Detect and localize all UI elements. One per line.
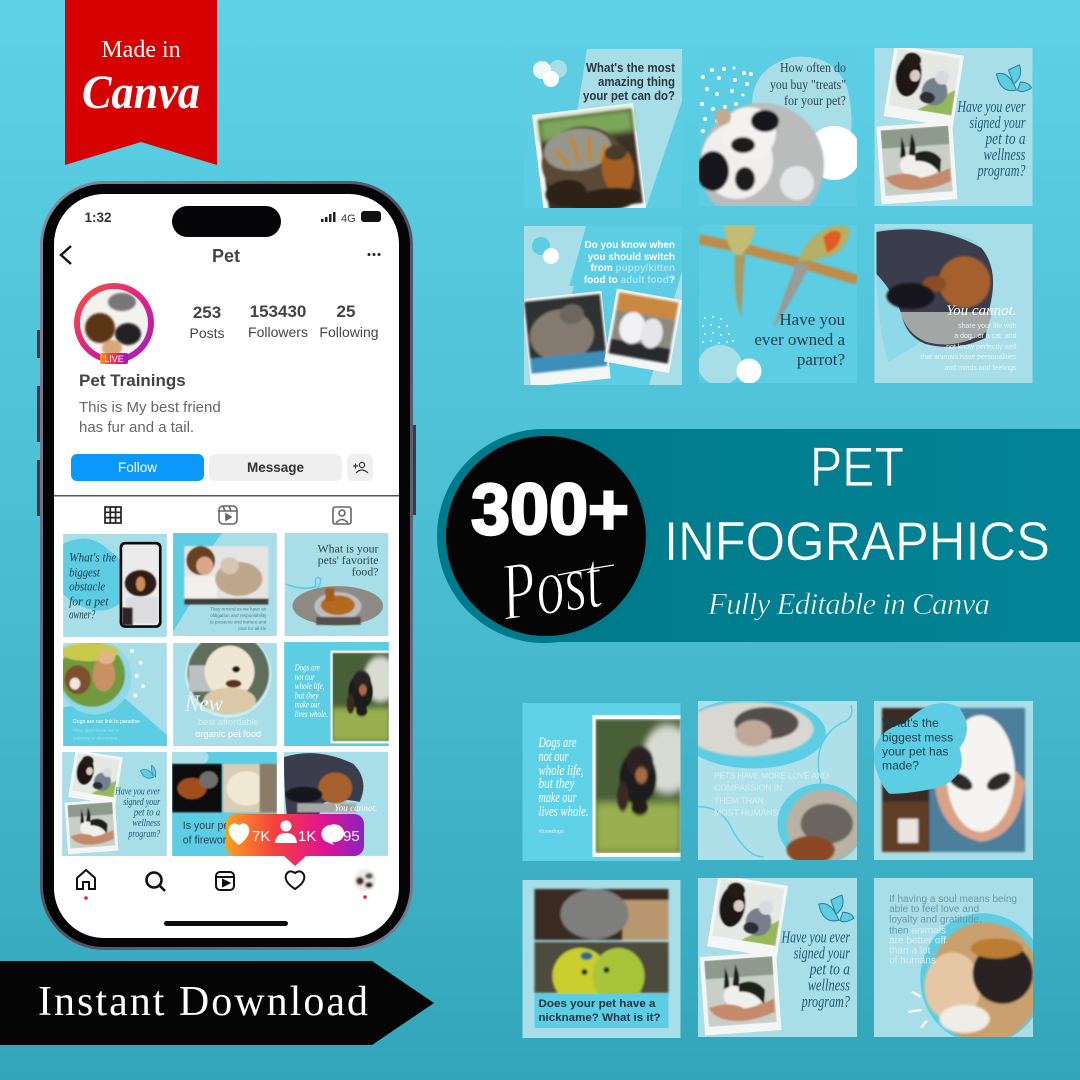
phone post 7: wellness program: pet to a [133,808,160,819]
phone post 6: running dog: whole life, [295,682,325,692]
phone mockup [37,181,416,950]
icon: reels [216,872,234,890]
heading: INFOGRAPHICS: INFOGRAPHICS [664,510,1050,572]
subheading: Fully Editable in Canva: Fully Editable in Canva [707,586,990,621]
status bar [84,206,381,237]
phone post 1: biggest obstacle [63,534,167,637]
post tile: you cannot: and minds and feelings [944,365,1017,372]
phone post 1: biggest obstacle: obstacle [69,578,105,593]
follow button [71,454,204,481]
engagement badge [226,814,364,866]
icon: heart [286,871,304,889]
post tile: treats: How often do [780,61,846,76]
post tile: you cannot: that animals have personalities [920,354,1017,361]
post tile: soul quote: able to feel love and [889,904,979,915]
phone post 4: puppies on grass [63,643,167,746]
phone post 6: running dog [284,642,389,746]
post tile: treats: for your pet? [784,94,846,109]
phone post 3: favorite food: food? [352,565,378,579]
phone post 2: girl and husky: They remind us we have an [210,606,267,611]
tab icon: tagged [333,507,351,524]
engagement badge: 95 [343,828,360,845]
post tile: switch food: Do you know when [584,240,675,251]
post tile: you cannot: a dog...or a cat, and [954,333,1017,340]
phone post 9: dog and cat: You cannot. [334,803,377,813]
post tile: soul quote: of humans [889,956,936,967]
profile bio: has fur and a tail. [79,419,194,436]
phone post 3: favorite food [284,533,388,636]
icon: home [77,870,95,889]
tab icon: reels [219,506,237,524]
post tile: soul quote: are better off [889,935,946,946]
phone post 2: girl and husky: to preserve and nurture and [210,620,267,625]
phone post 4: puppies on grass: They don't know evil or [73,728,120,733]
post tile: pets have more love: THEM THAN [714,796,764,806]
phone post 5: golden retriever: best affordable [198,717,259,727]
phone post 5: golden retriever: organic pet food [195,729,261,739]
nav notification dots [84,895,367,900]
ribbon text: Canva: Canva [82,66,200,119]
banner: Instant Download [0,961,434,1045]
status bar: 4G [341,213,356,225]
bottom nav icons [77,870,304,891]
post tile: switch food: from puppy/kitten [591,263,675,274]
phone post 8: fireworks: Is your pet afraid [183,820,262,832]
engagement badge: 1K [298,828,316,845]
post tile: parrot: ever owned a [754,330,845,349]
post tile: dogs are not our whole life: lives whole. [538,804,588,820]
phone screen [54,194,399,938]
banner: Instant Download: Instant Download [38,979,368,1025]
ribbon text: Made in: Made in [101,37,181,63]
post tile: amazing thing: What's the most [586,61,676,75]
profile stats: Following [319,324,379,340]
post tile: switch food: food to adult food? [584,275,675,286]
post tile: pets have more love: PETS HAVE MORE LOVE AND [714,770,829,780]
profile stats: Followers [248,324,308,340]
profile stats: 253 [193,303,221,322]
post tile: soul quote: than a lot [889,945,931,956]
ribbon: Made in Canva [65,0,217,165]
black badge circle: 300+ Post: 300+ [471,470,629,550]
person icon [275,820,297,843]
post tile: biggest mess: your pet has [882,744,948,758]
avatar with live badge [74,283,154,364]
nav header [61,246,380,266]
divider line [54,495,399,496]
post tile: dogs are not our whole life: #lovedogs [538,829,564,835]
phone post 2: girl and husky: obligation and responsibility [210,613,267,618]
phone post 1: biggest obstacle: owner? [69,607,96,622]
post tile: parrot [699,225,857,383]
icon: leaves [996,65,1032,92]
post tile: you cannot [874,224,1032,383]
post tile: biggest mess [874,701,1033,860]
post tile: wellness program [874,48,1032,206]
profile name: Pet Trainings [79,371,186,390]
phone post 4: puppies on grass: Dogs are our link to paradise [73,719,140,725]
engagement badge: 7K [252,828,270,845]
post tile: parrot: parrot? [797,350,845,369]
post tile: nickname: Does your pet have a [538,998,656,1010]
post tile: dogs are not our whole life: make our [538,790,577,806]
post tile: amazing thing: amazing thing [598,75,675,89]
phone post 3: favorite food: What is your [318,542,379,556]
post tile: nickname: nickname? What is it? [538,1012,661,1024]
post tile: treats: you buy "treats" [770,78,846,93]
post tile: nickname [522,880,680,1038]
post tile: you cannot: You cannot. [946,303,1016,319]
home indicator [164,921,288,926]
post tile: amazing thing: your pet can do? [583,89,675,103]
post tile: dogs are not our whole life: but they [538,776,575,792]
phone post 6: running dog: but they [295,691,319,701]
post tile: soul quote: loyalty and gratitude, [889,914,982,925]
post tile: soul quote [874,878,1033,1037]
phone side buttons [37,330,416,516]
phone post 1: biggest obstacle: biggest [69,565,100,580]
phone post 6: running dog: lives whole. [295,710,328,720]
message button: Message [247,460,305,475]
tab icon: grid [105,507,121,523]
phone post 9: dog and cat [284,752,388,856]
post tile: dogs are not our whole life [522,703,680,861]
post tile: biggest mess: biggest mess [882,730,953,744]
post tile: switch food: you should switch [588,252,675,263]
post tile: soul quote: then animals [889,925,946,936]
black badge circle: 300+ Post [446,436,646,638]
profile stats: 153430 [250,302,306,321]
profile bio [79,399,221,436]
post tile: dogs are not our whole life: Dogs are [538,735,577,751]
phone post 8: fireworks [172,752,277,856]
black badge circle: 300+ Post: Post [494,533,608,638]
post tile: parrot: Have you [779,310,845,329]
phone post 6: running dog: make our [295,701,320,711]
status bar: 1:32 [84,210,112,225]
post tile: amazing thing [532,49,682,208]
post tile: pets have more love [698,701,857,860]
phone post 7: wellness program [62,752,167,856]
post tile: wellness program 2 [698,878,857,1037]
icon: search [146,872,165,891]
profile stats: Posts [189,325,225,341]
follow button: Follow [118,460,157,475]
phone post 2: girl and husky: care for all life [238,626,267,631]
title banner: Pet Infographics [437,429,1080,643]
icon: leaves [819,895,854,922]
avatar with live badge: LIVE [104,354,124,364]
phone post 4: puppies on grass: jealousy or discontent [72,735,118,740]
phone body [40,181,413,950]
post tile: biggest mess: What's the [882,716,939,730]
post tile: dogs are not our whole life: whole life, [538,763,584,779]
post tile: soul quote: If having a soul means being [889,894,1017,905]
post tile: pets have more love: MOST HUMANS [714,808,778,818]
post tile: pets have more love: COMPASSION IN [714,783,782,793]
phone post 3: favorite food: pets' favorite [318,553,378,567]
message button [209,454,342,481]
post tile: biggest mess: made? [882,758,919,772]
post tile: you cannot: share your life with [958,323,1017,330]
nav header: Pet [212,246,240,266]
profile stats: 25 [337,302,355,321]
phone post 1: biggest obstacle: What's the [69,550,116,565]
phone post 6: running dog: Dogs are [294,663,320,673]
add friend button [347,454,373,481]
heading: PET: PET [810,435,904,498]
post tile: switch food [524,226,682,385]
post tile: you cannot: not know perfectly well [946,344,1017,351]
comment icon [321,824,344,845]
phone post 5: golden retriever [173,643,277,746]
profile stats [189,302,379,341]
phone post 2: girl and husky [173,533,277,636]
phone post 5: golden retriever: New [184,691,223,717]
nav profile avatar [354,869,376,891]
phone post 6: running dog: not our [295,673,315,683]
profile bio: This is My best friend [79,399,221,416]
post tile: dogs are not our whole life: not our [538,749,569,765]
heart icon [229,824,249,845]
post tile: treats [699,56,857,206]
phone post 8: fireworks: of fireworks? [183,834,243,846]
phone post 1: biggest obstacle: for a pet [69,594,109,609]
